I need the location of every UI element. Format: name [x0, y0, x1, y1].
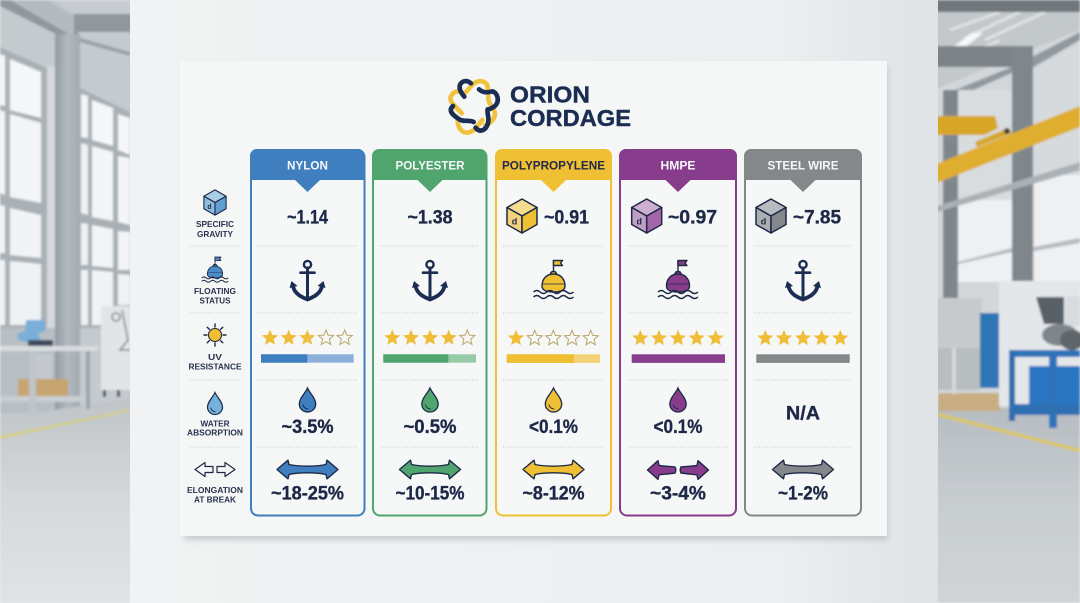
row label: specific gravity: d — [207, 204, 212, 211]
specific gravity: cube and value: d — [636, 216, 642, 226]
row label: elongation at break — [187, 462, 243, 504]
icon: anchor sinks — [290, 261, 326, 300]
elongation value: ~18-25% — [271, 484, 344, 504]
icon: drop — [299, 388, 316, 412]
specific gravity value: ~1.14 — [287, 208, 328, 228]
specific gravity: cube and value: d — [761, 216, 766, 226]
panel: polypropylene — [495, 149, 612, 516]
UV stars: 5 of 5 — [632, 330, 724, 345]
header: steel wire: STEEL WIRE — [768, 160, 839, 172]
water absorption value: ~0.5% — [404, 417, 457, 438]
header: polypropylene — [495, 149, 612, 192]
panel: polyester — [372, 149, 487, 516]
pipe — [934, 162, 1080, 213]
row label: specific gravity: SPECIFIC — [196, 219, 234, 229]
UV stars: 4 of 5 — [384, 330, 475, 345]
yellow floor line — [0, 409, 130, 439]
header: HMPE: HMPE — [660, 160, 696, 172]
UV bar — [507, 354, 600, 363]
header: steel wire — [744, 149, 862, 192]
icon: anchor sinks — [412, 261, 448, 300]
row label: floating status: FLOATING — [194, 286, 236, 296]
row label: floating status: STATUS — [200, 296, 231, 306]
specific gravity: cube and value: ~0.91 — [544, 208, 589, 228]
specific gravity: cube and value: ~0.97 — [668, 208, 717, 228]
row label: UV resistance: UV — [208, 352, 222, 362]
logo wordmark — [510, 82, 631, 131]
panel: HMPE — [619, 149, 737, 516]
elongation value: ~10-15% — [396, 484, 465, 504]
blue workbench — [1009, 350, 1080, 428]
row label: specific gravity: GRAVITY — [197, 229, 233, 239]
panel: steel wire — [744, 149, 862, 516]
icon: elongation arrow — [400, 460, 460, 479]
icon: anchor sinks — [785, 261, 821, 300]
yellow floor line — [934, 412, 1080, 452]
UV bar — [383, 354, 476, 363]
row label: UV resistance — [188, 324, 242, 371]
board shadow — [184, 66, 888, 540]
column — [55, 34, 80, 412]
window: left — [0, 47, 47, 329]
machine — [101, 306, 134, 397]
icon: drop — [422, 388, 438, 412]
window: middle — [80, 88, 130, 330]
elongation value: ~1-2% — [778, 484, 828, 504]
floor — [0, 398, 134, 603]
header: nylon: NYLON — [287, 160, 328, 172]
elongation value: ~3-4% — [650, 484, 706, 504]
icon: elongation arrow — [772, 460, 834, 479]
header: polypropylene: POLYPROPYLENE — [502, 160, 605, 172]
UV stars: 5 of 5 — [757, 330, 848, 345]
logo — [450, 81, 631, 133]
machines — [934, 281, 1080, 406]
background: factory interior left — [0, 0, 134, 603]
specific gravity: cube and value: d — [512, 216, 517, 226]
row label: specific gravity — [196, 190, 234, 239]
water absorption value: ~3.5% — [282, 417, 334, 438]
icon: buoy floats — [658, 260, 698, 298]
icon: drop — [545, 388, 562, 412]
crane — [934, 106, 1080, 184]
row label: elongation at break: ELONGATION — [187, 485, 243, 495]
row labels column — [187, 190, 243, 504]
elongation value: ~8-12% — [522, 484, 585, 504]
white board — [180, 61, 887, 536]
icon: split elongation arrows — [648, 461, 708, 479]
specific gravity: cube and value — [756, 199, 841, 233]
row label: UV resistance: RESISTANCE — [188, 361, 242, 371]
icon: buoy floats — [534, 260, 574, 298]
ceiling light — [950, 33, 983, 49]
header: polyester: POLYESTER — [396, 160, 465, 172]
header: polyester — [372, 149, 487, 192]
specific gravity value: ~1.38 — [408, 208, 452, 228]
specific gravity: cube and value — [632, 199, 717, 233]
row label: elongation at break: AT BREAK — [194, 494, 237, 504]
water absorption value: N/A — [786, 404, 820, 424]
logo wordmark: CORDAGE — [510, 105, 631, 131]
row label: floating status — [194, 257, 236, 306]
header: HMPE — [619, 149, 737, 192]
row label: water absorption: WATER — [200, 418, 230, 428]
UV bar — [632, 354, 725, 363]
specific gravity: cube and value: ~7.85 — [793, 208, 841, 228]
background: factory interior right — [934, 0, 1080, 603]
row label: water absorption — [187, 392, 243, 438]
water absorption value: <0.1% — [529, 417, 578, 438]
icon: drop — [670, 388, 686, 412]
row label: water absorption: ABSORPTION — [187, 428, 243, 438]
UV bar — [261, 354, 354, 363]
logo wordmark: ORION — [510, 82, 590, 108]
wall panel — [130, 0, 938, 603]
UV stars: 1 of 5 — [508, 330, 598, 345]
icon: elongation arrow — [277, 460, 338, 479]
logo mark — [450, 81, 498, 133]
pallet — [938, 393, 1000, 411]
header: nylon — [250, 149, 365, 192]
icon: elongation arrow — [523, 460, 584, 479]
UV bar — [756, 354, 850, 363]
specific gravity: cube and value — [507, 199, 589, 233]
water absorption value: <0.1% — [654, 417, 703, 438]
UV stars: 3 of 5 — [262, 330, 352, 345]
workbench — [0, 320, 98, 417]
panel: nylon — [250, 149, 365, 516]
steel beam — [934, 46, 1016, 67]
floor — [934, 408, 1080, 603]
steel columns — [1012, 46, 1033, 282]
